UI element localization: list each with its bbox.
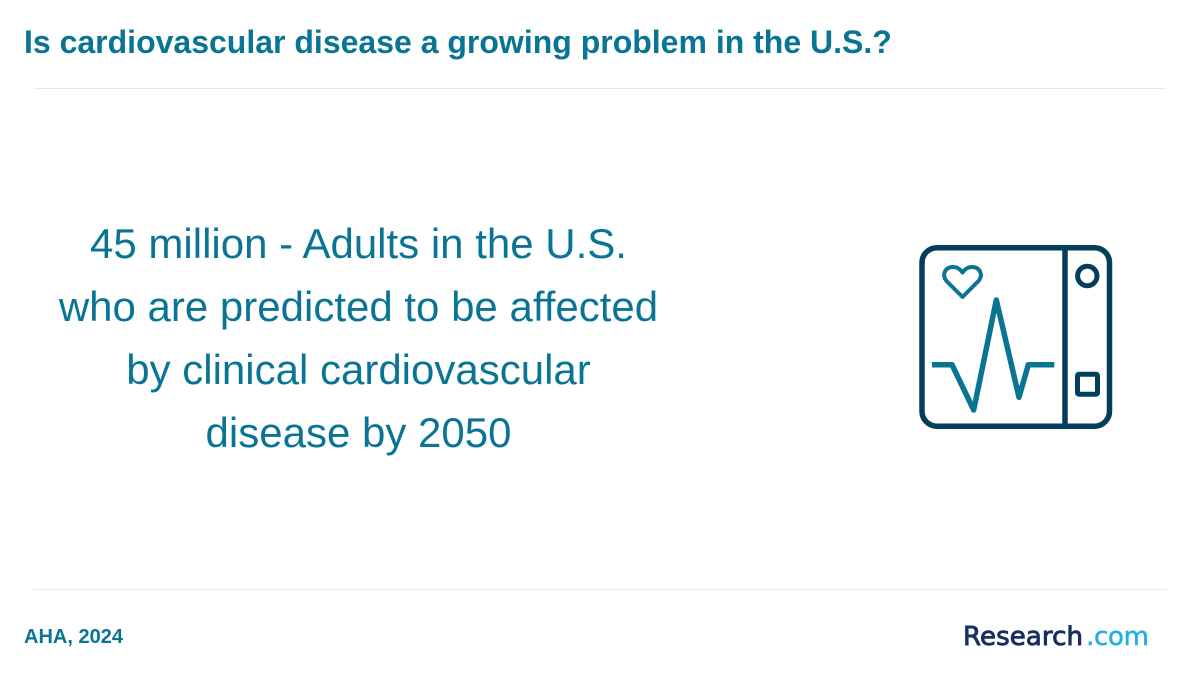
source: AHA, 2024 bbox=[24, 626, 123, 648]
icon: heart rate monitor bbox=[919, 245, 1112, 429]
main statistic text bbox=[58, 220, 658, 456]
main statistic text: disease by 2050 bbox=[206, 409, 511, 456]
title: Is cardiovascular disease a growing problem in the U.S.? bbox=[24, 24, 892, 60]
logo: Research.com: Research.com bbox=[963, 622, 1149, 652]
main statistic text: by clinical cardiovascular bbox=[126, 346, 591, 393]
main statistic text: 45 million - Adults in the U.S. bbox=[90, 220, 627, 267]
main statistic text: who are predicted to be affected bbox=[59, 283, 658, 330]
